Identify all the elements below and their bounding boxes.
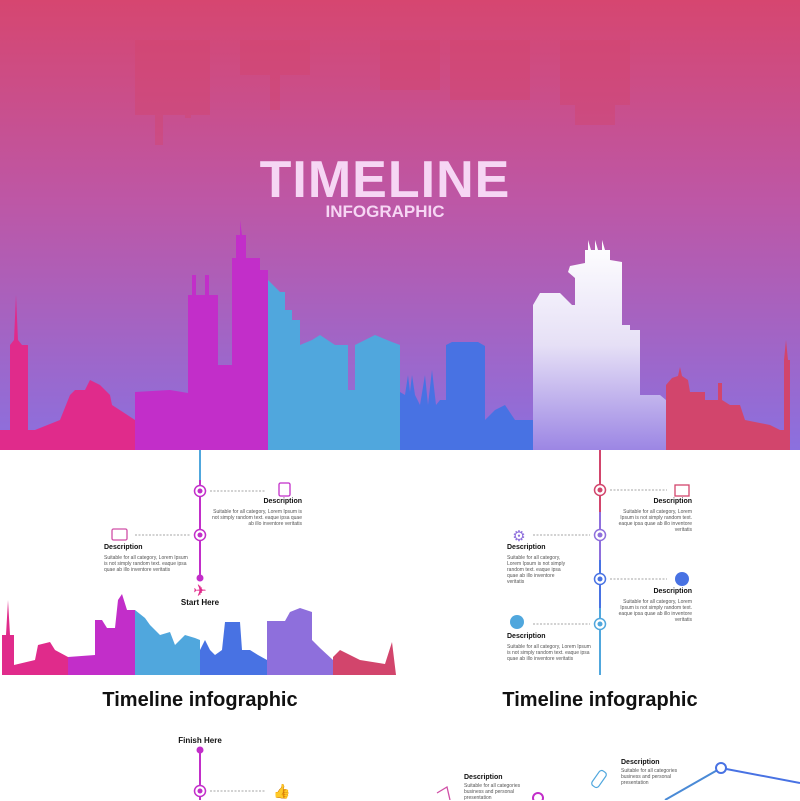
panel: right timeline: ⚙ [512, 528, 526, 545]
text block: desc 2 [104, 544, 188, 573]
text block: desc head [507, 632, 591, 662]
hero panel [0, 0, 800, 450]
label: start: Start Here [181, 598, 219, 607]
skyline: crimson [666, 340, 800, 450]
title: TIMELINE [260, 151, 510, 209]
text block: chart desc 1 [464, 774, 520, 801]
text block: desc 2: Description [104, 544, 143, 551]
bottom chart [665, 768, 721, 800]
skyline: white [533, 240, 666, 450]
panel: left timeline: 👍 [273, 783, 291, 800]
text block: desc palette: Description [653, 588, 692, 595]
faded reflection skyline [135, 40, 630, 145]
icon: plane: ✈ [193, 583, 207, 600]
text block: chart desc 1: Description [464, 774, 503, 781]
skyline: blue [400, 342, 533, 450]
skyline: cyan [268, 280, 400, 450]
skyline: magenta [135, 220, 268, 450]
text block: desc gears: Suitable for all category, Lorem Ipsum is not simply random text. eaque ipsa quae ab illo inventore veritatis [507, 555, 565, 585]
text block: desc 1 [212, 498, 302, 527]
text block: chart desc 1: Suitable for all categories business and personal presentation [464, 783, 520, 801]
text block: desc gears: Description [507, 544, 546, 551]
text blocks right: Suitable for all category, Lorem Ipsum is not simply random text. eaque ipsa quae ab illo inventore veritatis [619, 509, 692, 533]
skyline: pink [0, 295, 135, 450]
text block: desc head: Suitable for all category, Lorem Ipsum is not simply random text. eaque ipsa quae ab illo inventore veritatis [507, 644, 591, 662]
text block: desc 1: Suitable for all category, Lorem Ipsum is not simply random text. eaque ipsa quae ab illo inventore veritatis [212, 509, 302, 527]
text block: chart desc 2 [621, 758, 677, 786]
text block: desc 1: Description [263, 498, 302, 505]
text block: chart desc 2: Suitable for all categories business and personal presentation [621, 768, 677, 786]
text block: desc palette [618, 588, 692, 623]
label: finish: Finish Here [178, 736, 222, 745]
text blocks right [618, 498, 692, 533]
text block: desc head: Description [507, 633, 546, 640]
heading: right: Timeline infographic [502, 689, 698, 711]
text block: desc palette: Suitable for all category, Lorem Ipsum is not simply random text. eaque ipsa quae ab illo inventore veritatis [619, 599, 692, 623]
text block: desc 2: Suitable for all category, Lorem Ipsum is not simply random text. eaque ipsa quae ab illo inventore veritatis [104, 555, 188, 573]
skyline bottom [2, 600, 68, 675]
text block: chart desc 2: Description [621, 759, 660, 766]
panel: left timeline [2, 450, 396, 800]
heading: left: Timeline infographic [102, 689, 298, 711]
text blocks right: Description [653, 498, 692, 505]
panel: right timeline [436, 450, 800, 801]
subtitle: INFOGRAPHIC [326, 202, 444, 221]
